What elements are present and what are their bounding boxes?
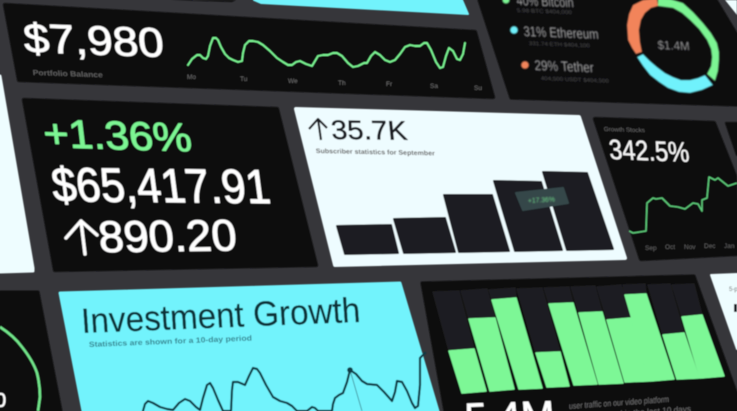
axis labels: months: Nov	[684, 244, 696, 251]
legend: tether: 29% Tether	[534, 57, 595, 75]
stat: subscribers: 35.7K	[330, 115, 409, 146]
axis labels: weekdays: Sa	[430, 83, 438, 90]
panel: top-left sliver	[170, 0, 236, 2]
axis labels: weekdays: Fr	[386, 81, 393, 88]
stat: growth: 342.5%	[608, 134, 691, 168]
mark: right card value	[734, 304, 737, 312]
stat: balance: $65,417.91	[48, 158, 273, 214]
panel: right light card	[711, 274, 737, 349]
icon: up arrow dark	[309, 119, 327, 140]
heading: investment growth: Investment Growth	[80, 291, 362, 341]
stat: percent change: +1.36%	[41, 111, 194, 160]
heading: portfolio value: $7,980	[21, 15, 166, 66]
axis labels: months	[645, 243, 735, 252]
caption: traffic: user traffic on our video platform	[569, 394, 669, 411]
panel: portfolio balance	[5, 5, 493, 97]
chart: green bars	[449, 294, 724, 393]
panel edge: far right card	[726, 123, 737, 155]
icon: up arrow	[66, 221, 97, 254]
legend: ethereum	[510, 23, 599, 49]
caption: subscribers: Subscriber statistics for September	[316, 148, 436, 157]
label: portfolio balance: Portfolio Balance	[32, 68, 103, 79]
panel: left gauge	[0, 292, 61, 411]
panel: top cyan card	[254, 0, 468, 14]
marker dot	[347, 367, 353, 373]
axis labels: weekdays: Su	[474, 85, 482, 92]
stat: gain: 890.20	[96, 211, 239, 262]
legend: tether: 404,500 USDT $404,500	[541, 76, 609, 85]
panel: traffic bars	[422, 276, 737, 411]
axis labels: weekdays: We	[288, 78, 298, 85]
badge: growth rate	[516, 188, 568, 210]
corner: light card top right	[725, 0, 737, 15]
axis labels: months: Jan	[724, 243, 735, 250]
panel: subscribers	[296, 109, 625, 265]
bar chart: subscribers	[337, 172, 613, 254]
gauge arc	[0, 327, 40, 411]
line chart: weekly portfolio	[188, 38, 465, 68]
caption: period: Statistics are shown for a 10-day period	[89, 333, 253, 349]
donut centre value: $1.4M	[657, 38, 690, 53]
panel: crypto allocation	[479, 0, 737, 105]
panel: left light card	[0, 76, 33, 272]
legend: tether	[521, 57, 609, 85]
axis labels: weekdays	[187, 74, 482, 92]
chart: bar tracks	[433, 284, 702, 353]
label: growth stocks: Growth Stocks	[604, 127, 645, 134]
legend: ethereum: 331.74 ETH $404,100	[529, 41, 590, 49]
axis labels: weekdays: Mo	[187, 74, 196, 81]
legend: bitcoin	[502, 0, 574, 16]
legend: ethereum: 31% Ethereum	[523, 23, 599, 42]
line chart: growth	[629, 177, 737, 233]
axis labels: months: Dec	[704, 243, 716, 250]
panel: growth stocks	[595, 119, 737, 259]
axis labels: weekdays: Tu	[240, 76, 248, 83]
panel: investment growth	[60, 283, 438, 411]
legend: bitcoin: 5.98 BTC $404,000	[517, 8, 572, 16]
badge: growth rate: +17.36%	[528, 197, 555, 205]
panel: big numbers	[24, 100, 316, 270]
axis labels: weekdays: Th	[338, 80, 346, 87]
line chart: investment	[143, 353, 425, 411]
marker line	[350, 370, 362, 411]
axis labels: months: Oct	[665, 244, 675, 251]
donut chart	[627, 0, 719, 93]
axis labels: months: Sep	[645, 245, 657, 252]
